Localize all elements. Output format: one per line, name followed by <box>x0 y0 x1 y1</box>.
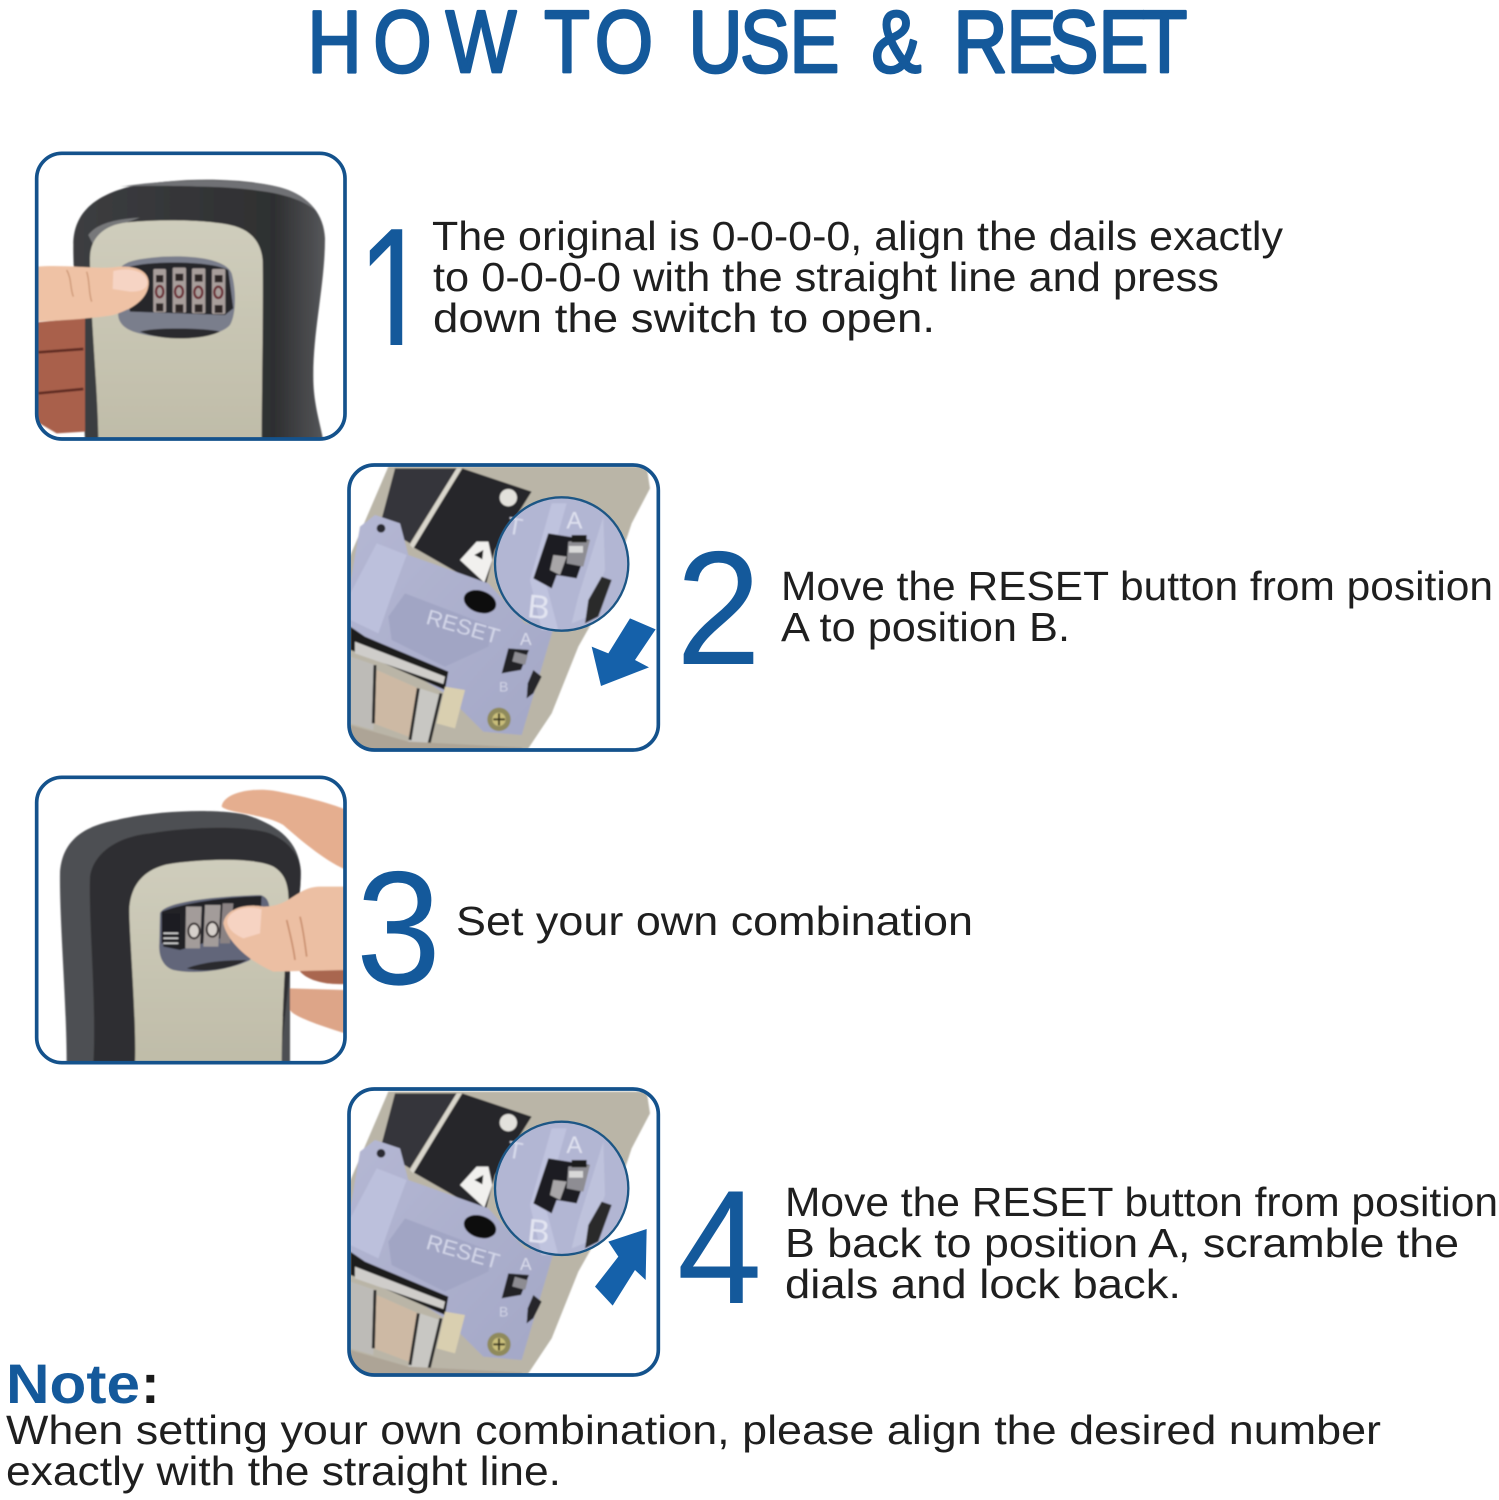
outer shell <box>348 1092 650 1378</box>
reset lettering: RESET <box>424 605 502 649</box>
arrow up-right <box>595 1229 647 1306</box>
lower fingers <box>299 969 344 986</box>
black oval sticker <box>463 1214 497 1240</box>
panel: step 2 photo, reset switch moved to B: B <box>499 679 508 695</box>
latch <box>460 1167 492 1208</box>
step 2 text <box>781 563 1493 650</box>
magnifier <box>495 497 628 631</box>
panel: step 1 photo, finger pressing dials <box>37 153 345 442</box>
panel: step 4 photo, reset switch moved back to A: B <box>526 1213 552 1252</box>
note heading: Note <box>6 1352 140 1415</box>
pin <box>500 1114 517 1131</box>
pin <box>500 489 517 506</box>
lockbox body <box>60 811 301 1063</box>
panel: step 4 photo, reset switch moved back to A: B <box>499 1304 508 1320</box>
step 4 text: Move the RESET button from position <box>785 1179 1498 1225</box>
reset lettering: RESET <box>424 1230 502 1274</box>
step 2 text: A to position B. <box>781 604 1070 650</box>
small slider <box>502 648 529 673</box>
panel: step 4 photo, reset switch moved back to A: A <box>566 1132 582 1159</box>
thumb <box>223 887 345 972</box>
border <box>349 1089 658 1375</box>
panel: step 3 photo, setting the dials <box>37 777 345 1063</box>
border <box>37 153 345 439</box>
panel: step 2 photo, reset switch moved to B: B <box>526 588 552 627</box>
numeral 3: 3 <box>356 838 441 1019</box>
note text: exactly with the straight line. <box>6 1448 561 1494</box>
panel: step 2 photo, reset switch moved to B: T <box>505 512 525 542</box>
arrow down-left <box>592 618 656 686</box>
panel: step 2 photo, reset switch moved to B <box>348 465 658 753</box>
lavender plate <box>350 1140 553 1360</box>
clip assembly <box>350 1252 448 1315</box>
note heading: : <box>141 1352 160 1415</box>
step 4 text <box>785 1179 1498 1307</box>
clip assembly <box>350 627 448 690</box>
lockbox body outer <box>73 180 325 442</box>
dark compartments <box>380 468 457 543</box>
note text: When setting your own combination, please align the desired number <box>6 1407 1381 1453</box>
dials <box>153 268 225 314</box>
lockbox beige face <box>90 220 263 442</box>
screw <box>487 708 511 731</box>
dials <box>161 914 164 944</box>
step 2 text: Move the RESET button from position <box>781 563 1493 609</box>
black oval sticker <box>463 589 497 614</box>
lower hand <box>37 318 85 433</box>
border <box>349 465 658 750</box>
dial window <box>159 895 269 972</box>
panel: step 2 photo, reset switch moved to B: A <box>520 629 532 649</box>
top finger <box>222 790 345 869</box>
step 1 text: The original is 0-0-0-0, align the dails exactly <box>432 213 1284 259</box>
step 3 text: Set your own combination <box>456 898 973 944</box>
panel: step 4 photo, reset switch moved back to A: A <box>520 1254 532 1274</box>
numeral 2: 2 <box>676 518 761 699</box>
numeral 4: 4 <box>677 1157 762 1338</box>
lockbox beige face <box>129 860 289 1063</box>
latch <box>460 542 492 583</box>
outer shell <box>348 467 650 753</box>
note text <box>6 1407 1381 1494</box>
small slider <box>502 1273 529 1298</box>
dial window <box>118 256 235 338</box>
border <box>37 777 345 1063</box>
step 1 text: down the switch to open. <box>433 295 935 341</box>
numeral 1: 1 <box>357 189 431 401</box>
panel: step 4 photo, reset switch moved back to A: T <box>506 1136 525 1166</box>
magnifier <box>495 1122 628 1255</box>
step 4 text: B back to position A, scramble the <box>785 1220 1459 1266</box>
dark compartments <box>380 1093 457 1168</box>
step 4 text: dials and lock back. <box>785 1261 1181 1307</box>
screw <box>487 1333 511 1356</box>
panel: step 2 photo, reset switch moved to B: A <box>566 508 582 535</box>
lavender plate <box>350 515 553 735</box>
finger <box>37 266 149 322</box>
step 1 text <box>432 213 1284 341</box>
panel: step 4 photo, reset switch moved back to A <box>348 1089 658 1378</box>
step 1 text: to 0-0-0-0 with the straight line and press <box>433 254 1219 300</box>
